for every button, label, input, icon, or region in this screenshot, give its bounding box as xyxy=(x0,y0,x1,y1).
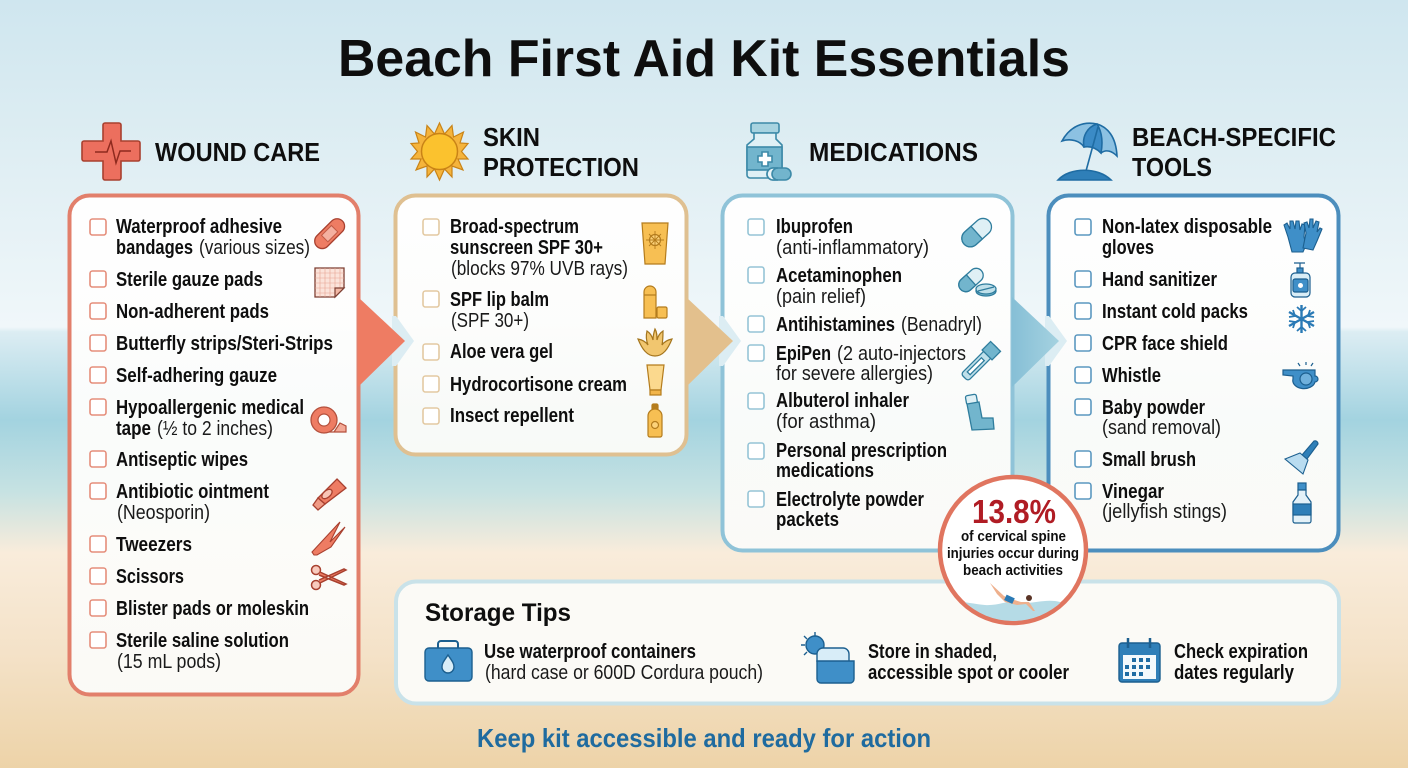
heading: skin protection: PROTECTION xyxy=(483,152,639,182)
footer message: Keep kit accessible and ready for action xyxy=(477,723,931,753)
illustration: swimmer in waves xyxy=(964,583,1060,621)
heading: beach-specific tools xyxy=(1132,122,1336,182)
item: butterfly strips: Butterfly strips/Steri-Strips xyxy=(116,333,333,355)
tip: shaded spot or cooler xyxy=(801,632,1069,684)
item: EpiPen xyxy=(748,343,966,385)
item: hypoallergenic medical tape xyxy=(90,397,304,440)
header icon: medicine bottle xyxy=(747,123,791,180)
item: broad-spectrum sunscreen: (blocks 97% UVB rays) xyxy=(451,258,628,280)
item: acetaminophen: Acetaminophen xyxy=(776,265,902,287)
item: SPF lip balm: SPF lip balm xyxy=(450,289,549,311)
item: baby powder: Baby powder xyxy=(1102,397,1205,419)
item: self-adhering gauze: Self-adhering gauze xyxy=(116,365,277,387)
item: antibiotic ointment: (Neosporin) xyxy=(117,502,210,524)
icon: calendar xyxy=(1119,638,1160,682)
item: insect repellent: Insect repellent xyxy=(450,405,574,427)
icon: brush xyxy=(1285,441,1318,474)
icon: bandage xyxy=(312,216,348,252)
item: hypoallergenic medical tape: tape xyxy=(116,418,151,440)
item: antihistamines: Antihistamines xyxy=(776,314,895,336)
panel: beach-specific tools xyxy=(1048,196,1338,550)
item: albuterol inhaler: Albuterol inhaler xyxy=(776,390,909,412)
item: acetaminophen: (pain relief) xyxy=(776,286,866,308)
item: acetaminophen xyxy=(748,265,902,308)
tip: shaded spot or cooler: Store in shaded, xyxy=(868,641,997,663)
header icon: sun xyxy=(411,123,468,180)
arrow: medications to beach-specific tools xyxy=(1012,297,1067,387)
icon: tweezers xyxy=(312,522,345,555)
item: personal prescription medications: medications xyxy=(776,460,874,482)
heading: skin protection xyxy=(483,122,639,182)
item: electrolyte powder packets: Electrolyte powder xyxy=(776,489,924,511)
item: non-adherent pads: Non-adherent pads xyxy=(116,301,269,323)
item: hypoallergenic medical tape: Hypoallergenic medical xyxy=(116,397,304,419)
panel: storage tips xyxy=(396,582,1339,704)
item: EpiPen: EpiPen xyxy=(776,343,831,365)
item: electrolyte powder packets: packets xyxy=(776,509,839,531)
item: antihistamines: (Benadryl) xyxy=(901,314,982,336)
item: aloe vera gel xyxy=(423,341,553,363)
item: electrolyte powder packets xyxy=(748,489,924,531)
item: broad-spectrum sunscreen: sunscreen SPF 30+ xyxy=(450,237,603,259)
header icon: medical cross xyxy=(82,123,140,180)
item: baby powder: (sand removal) xyxy=(1102,417,1221,439)
stat description: of cervical spine xyxy=(961,528,1066,545)
item: broad-spectrum sunscreen xyxy=(423,216,628,280)
item: antiseptic wipes: Antiseptic wipes xyxy=(116,449,248,471)
tip: waterproof containers xyxy=(425,641,763,684)
item: waterproof adhesive bandages: bandages xyxy=(116,237,193,259)
heading: skin protection: SKIN xyxy=(483,122,540,152)
item: waterproof adhesive bandages xyxy=(90,216,310,259)
icon: aloe plant xyxy=(638,329,672,356)
icon: gloves xyxy=(1284,219,1322,252)
icon: gauze pad xyxy=(315,268,344,297)
item: EpiPen: for severe allergies) xyxy=(776,363,933,385)
item: albuterol inhaler xyxy=(748,390,909,433)
item: SPF lip balm xyxy=(423,289,549,332)
heading: beach-specific tools: BEACH-SPECIFIC xyxy=(1132,122,1336,152)
tip: check expiration dates: dates regularly xyxy=(1174,662,1295,684)
icon: whistle xyxy=(1283,362,1318,389)
icon: repellent spray xyxy=(648,404,662,437)
icon: waterproof case xyxy=(425,641,472,681)
item: whistle xyxy=(1075,365,1161,387)
item: SPF lip balm: (SPF 30+) xyxy=(451,310,529,332)
item: sterile saline solution: Sterile saline solution xyxy=(116,630,289,652)
item: hypoallergenic medical tape: (½ to 2 inches) xyxy=(157,418,273,440)
callout: 13.8% statistic xyxy=(940,477,1086,630)
icon: capsule and tablet xyxy=(956,265,996,296)
panel: skin protection xyxy=(396,196,686,454)
icon: cooler with sun xyxy=(801,632,854,683)
item: waterproof adhesive bandages: Waterproof adhesive xyxy=(116,216,282,238)
arrow: skin protection to medications xyxy=(686,297,741,387)
item: small brush xyxy=(1075,449,1196,471)
item: ibuprofen: Ibuprofen xyxy=(776,216,853,238)
item: sterile saline solution: (15 mL pods) xyxy=(117,651,221,673)
icon: ointment tube xyxy=(313,479,346,510)
icon: epipen xyxy=(959,341,1001,383)
item: instant cold packs: Instant cold packs xyxy=(1102,301,1248,323)
tip: waterproof containers: Use waterproof containers xyxy=(484,641,696,663)
item: scissors xyxy=(90,566,184,588)
item: EpiPen: (2 auto-injectors xyxy=(837,343,966,365)
item: ibuprofen: (anti-inflammatory) xyxy=(776,237,929,259)
item: aloe vera gel: Aloe vera gel xyxy=(450,341,553,363)
item: CPR face shield: CPR face shield xyxy=(1102,333,1228,355)
icon: lip balm xyxy=(644,286,667,318)
icon: hand sanitizer pump xyxy=(1291,263,1310,297)
item: hand sanitizer: Hand sanitizer xyxy=(1102,269,1217,291)
item: antihistamines xyxy=(748,314,982,336)
item: tweezers: Tweezers xyxy=(116,534,192,556)
item: waterproof adhesive bandages: (various sizes) xyxy=(199,237,310,259)
header icon: beach umbrella xyxy=(1058,123,1117,180)
panel: medications xyxy=(722,196,1012,550)
item: personal prescription medications: Personal prescription xyxy=(776,440,947,462)
heading: medications: MEDICATIONS xyxy=(809,137,978,167)
item: hydrocortisone cream: Hydrocortisone cream xyxy=(450,374,627,396)
item: non-latex gloves: gloves xyxy=(1102,237,1154,259)
icon: snowflake xyxy=(1289,305,1314,333)
item: tweezers xyxy=(90,534,192,556)
item: small brush: Small brush xyxy=(1102,449,1196,471)
stat description: beach activities xyxy=(963,562,1063,579)
item: vinegar xyxy=(1075,481,1227,523)
item: baby powder xyxy=(1075,397,1221,439)
item: personal prescription medications xyxy=(748,440,947,482)
item: vinegar: (jellyfish stings) xyxy=(1102,501,1227,523)
item: ibuprofen xyxy=(748,216,929,259)
item: albuterol inhaler: (for asthma) xyxy=(776,411,876,433)
item: whistle: Whistle xyxy=(1102,365,1161,387)
heading: wound care: WOUND CARE xyxy=(155,137,320,167)
heading: beach-specific tools: TOOLS xyxy=(1132,152,1212,182)
tip: waterproof containers: (hard case or 600D Cordura pouch) xyxy=(485,662,763,684)
item: antibiotic ointment: Antibiotic ointment xyxy=(116,481,269,503)
item: sterile saline solution xyxy=(90,630,289,673)
item: vinegar: Vinegar xyxy=(1102,481,1164,503)
item: blister pads or moleskin: Blister pads or moleskin xyxy=(116,598,309,620)
icon: sunscreen tube xyxy=(642,223,668,264)
heading: storage tips: Storage Tips xyxy=(425,599,571,627)
tip: check expiration dates: Check expiration xyxy=(1174,641,1308,663)
item: antibiotic ointment xyxy=(90,481,269,524)
item: non-latex gloves xyxy=(1075,216,1272,259)
icon: capsule xyxy=(958,215,995,250)
item: scissors: Scissors xyxy=(116,566,184,588)
icon: tape roll xyxy=(311,407,346,433)
stat value: 13.8% xyxy=(972,493,1056,530)
arrow: wound care to skin protection xyxy=(358,297,414,387)
title: Beach First Aid Kit Essentials xyxy=(338,30,1070,88)
item: non-latex gloves: Non-latex disposable xyxy=(1102,216,1272,238)
icon: cream tube xyxy=(647,365,664,395)
stat description: injuries occur during xyxy=(947,545,1079,562)
panel: wound care xyxy=(70,196,358,694)
icon: scissors xyxy=(312,566,346,590)
tip: check expiration dates xyxy=(1119,638,1308,684)
item: broad-spectrum sunscreen: Broad-spectrum xyxy=(450,216,579,238)
stat description xyxy=(947,528,1079,579)
icon: vinegar bottle xyxy=(1293,483,1311,523)
tip: shaded spot or cooler: accessible spot or cooler xyxy=(868,662,1069,684)
icon: inhaler xyxy=(965,394,994,430)
item: sterile gauze pads: Sterile gauze pads xyxy=(116,269,263,291)
